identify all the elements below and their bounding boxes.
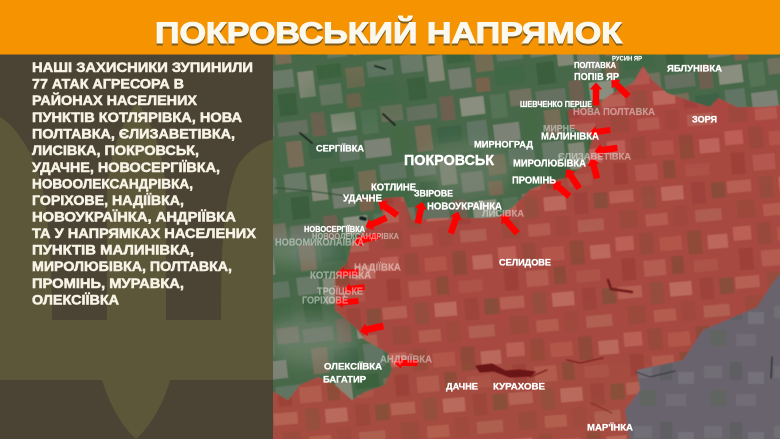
satellite map: terrain, urban and occupied areas bbox=[273, 54, 780, 439]
place labels: КОТЛЯРІВКА bbox=[310, 270, 371, 282]
place labels: ДАЧНЕ bbox=[446, 382, 478, 392]
place labels: БАГАТИР bbox=[323, 374, 366, 384]
place labels: МАЛИНІВКА bbox=[541, 132, 599, 142]
place labels: МИРНЕ bbox=[543, 124, 575, 134]
arrow: Новоолександрівка bbox=[353, 231, 379, 247]
place labels: КОТЛИНЕ bbox=[371, 182, 416, 194]
arrow: Миролюбівка east bbox=[587, 157, 602, 179]
place labels: ОЛЕКСІЇВКА bbox=[324, 362, 383, 372]
place labels: АНДРІЇВКА bbox=[380, 352, 432, 366]
arrow: Новосергіївка bbox=[364, 213, 388, 232]
arrow: Лисівка bbox=[498, 212, 521, 237]
place labels: МИРНОГРАД bbox=[474, 140, 534, 150]
arrow: Котлярівка bbox=[338, 267, 358, 278]
arrow: Попів Яр north-west bbox=[608, 76, 632, 100]
place labels: СЕЛИДОВЕ bbox=[499, 258, 551, 268]
panel body text: УДАЧНЕ, НОВОСЕРГІЇВКА, bbox=[32, 160, 220, 175]
place labels: ТРОЇЦЬКЕ bbox=[317, 284, 363, 298]
panel body text: ПУНКТІВ КОТЛЯРІВКА, НОВА bbox=[32, 110, 242, 125]
arrow: Попів Яр north bbox=[591, 83, 601, 105]
header banner bbox=[0, 0, 780, 54]
place labels: УДАЧНЕ bbox=[343, 194, 382, 204]
arrow: Троїцьке bbox=[344, 282, 365, 295]
place labels: ПОКРОВСЬК bbox=[404, 153, 494, 169]
title: ПОКРОВСЬКИЙ НАПРЯМОК bbox=[155, 16, 623, 50]
place labels: ПОПІВ ЯР bbox=[574, 72, 619, 83]
trident emblem watermark bbox=[0, 102, 274, 439]
place labels: НОВА ПОЛТАВКА bbox=[573, 107, 655, 118]
panel body text: ТА У НАПРЯМКАХ НАСЕЛЕНИХ bbox=[32, 226, 256, 241]
arrow: Промінь bbox=[550, 178, 573, 200]
place labels: ПОЛТАВКА bbox=[574, 61, 616, 70]
place labels: НАДІЇВКА bbox=[354, 260, 401, 274]
panel body text: ПУНКТІВ МАЛИНІВКА, bbox=[32, 242, 194, 258]
panel body text: МИРОЛЮБІВКА, ПОЛТАВКА, bbox=[32, 259, 232, 274]
left text panel background bbox=[0, 54, 274, 439]
panel body text: ПРОМІНЬ, МУРАВКА, bbox=[32, 276, 184, 291]
arrow: Андріївка bbox=[395, 358, 417, 368]
place labels: ГОРІХОВЕ bbox=[302, 296, 348, 306]
place labels: СЕРГІЇВКА bbox=[316, 144, 364, 154]
place labels: ШЕВЧЕНКО ПЕРШЕ bbox=[520, 100, 593, 109]
panel body text: ПОЛТАВКА, ЄЛИЗАВЕТІВКА, bbox=[32, 126, 235, 142]
place labels: ЗВІРОВЕ bbox=[414, 188, 453, 198]
arrow: Миролюбівка south bbox=[562, 167, 583, 191]
arrow: Звірове bbox=[413, 201, 427, 224]
panel body text: ГОРІХОВЕ, НАДІЇВКА, bbox=[32, 193, 184, 208]
panel body text: НАШІ ЗАХИСНИКИ ЗУПИНИЛИ bbox=[32, 60, 253, 75]
place labels: ЛИСІВКА bbox=[482, 208, 525, 218]
place labels: НОВОМИКОЛАЇВКА bbox=[275, 236, 364, 248]
arrow: Удачне bbox=[376, 198, 400, 219]
place labels: МАР'ЇНКА bbox=[587, 422, 634, 432]
place labels: ЗОРЯ bbox=[692, 114, 717, 124]
panel body text: 77 АТАК АГРЕСОРА В bbox=[32, 76, 184, 92]
place labels: НОВОСЕРГІЇВКА bbox=[304, 225, 365, 234]
arrow: Горіхове bbox=[336, 296, 358, 308]
place labels: ЯБЛУНІВКА bbox=[667, 64, 723, 74]
place labels: НОВОУКРАЇНКА bbox=[427, 200, 502, 212]
place labels bbox=[275, 56, 723, 432]
arrow: south of Горіхове bbox=[359, 321, 384, 337]
water bodies and rivers bbox=[275, 66, 772, 413]
panel body text: ЛИСІВКА, ПОКРОВСЬК, bbox=[32, 143, 199, 158]
arrow: Єлизаветівка bbox=[594, 143, 618, 156]
arrow: Новоукраїнка bbox=[446, 210, 463, 235]
place labels: НОВООЛЕКСАНДРІВКА bbox=[312, 232, 399, 241]
panel body text: ОЛЕКСІЇВКА bbox=[32, 292, 119, 308]
place labels: ЄЛИЗАВЕТІВКА bbox=[558, 152, 632, 162]
place labels: РУСИН ЯР bbox=[612, 56, 643, 62]
arrow: Малинівка bbox=[589, 125, 611, 138]
place labels: ПРОМІНЬ bbox=[512, 176, 556, 186]
panel body text: РАЙОНАХ НАСЕЛЕНИХ bbox=[32, 93, 197, 108]
place labels: МИРОЛЮБІВКА bbox=[513, 158, 586, 170]
place labels: КУРАХОВЕ bbox=[493, 382, 545, 392]
panel body text: НОВОУКРАЇНКА, АНДРІЇВКА bbox=[32, 210, 236, 224]
panel body text bbox=[32, 60, 256, 308]
panel body text: НОВООЛЕКСАНДРІВКА, bbox=[32, 176, 193, 192]
